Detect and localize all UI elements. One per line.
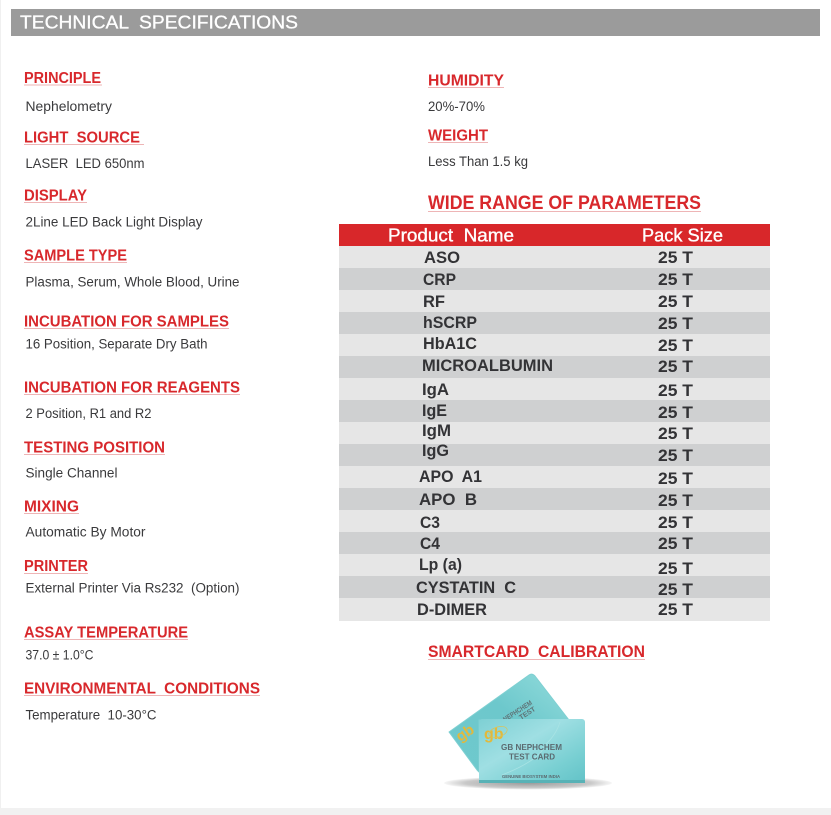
front card: GB NEPHCHEM <box>501 742 562 752</box>
pack sizes: 25 T <box>658 315 693 333</box>
product names: ASO <box>424 249 460 267</box>
spec: display: 2Line LED Back Light Display <box>26 214 203 230</box>
product names: APO A1 <box>419 468 482 486</box>
spec: testing position: Single Channel <box>26 466 118 480</box>
spec: humidity: 20%-70% <box>428 99 485 114</box>
product names: C3 <box>420 514 440 532</box>
spec: environmental conditions: ENVIRONMENTAL CONDITIONS <box>24 680 260 698</box>
pack sizes: 25 T <box>658 492 693 510</box>
front card <box>479 719 585 783</box>
spec: printer <box>24 558 240 596</box>
spec: light source: LASER LED 650nm <box>26 156 144 171</box>
icon: smart cards <box>444 674 612 790</box>
spec: weight <box>428 128 528 169</box>
spec: printer: External Printer Via Rs232 (Option) <box>26 580 240 596</box>
pack sizes: 25 T <box>658 249 693 267</box>
pack sizes: 25 T <box>658 404 693 422</box>
spec: environmental conditions: Temperature 10-30°C <box>26 708 157 722</box>
spec: mixing: Automatic By Motor <box>26 524 146 540</box>
spec: printer: PRINTER <box>24 558 88 575</box>
pack sizes: 25 T <box>658 535 693 553</box>
product names: HbA1C <box>423 335 477 353</box>
back card <box>449 674 569 772</box>
table header <box>339 224 770 246</box>
product names: IgE <box>422 402 447 420</box>
spec: principle <box>24 70 112 114</box>
pack sizes: 25 T <box>658 514 693 532</box>
pack sizes: 25 T <box>658 293 693 311</box>
spec: display <box>24 188 203 230</box>
pack sizes: 25 T <box>658 601 693 619</box>
spec: testing position <box>24 440 165 480</box>
pack sizes <box>658 249 693 619</box>
spec: display: DISPLAY <box>24 188 87 204</box>
spec: incubation for samples: INCUBATION FOR SAMPLES <box>24 314 229 330</box>
pack sizes: 25 T <box>658 560 693 578</box>
spec: assay temperature: ASSAY TEMPERATURE <box>24 624 188 642</box>
product names: IgG <box>422 442 449 460</box>
pack sizes: 25 T <box>658 271 693 289</box>
title banner: TECHNICAL SPECIFICATIONS <box>20 12 298 32</box>
spec: mixing <box>24 498 146 540</box>
spec: incubation for reagents: INCUBATION FOR REAGENTS <box>24 380 240 396</box>
product names <box>416 249 553 619</box>
title banner <box>11 9 820 36</box>
product names: hSCRP <box>423 314 477 332</box>
back card: NEPHCHEM <box>502 700 534 724</box>
table header: Product Name <box>388 226 514 246</box>
pack sizes: 25 T <box>658 581 693 599</box>
pack sizes: 25 T <box>658 425 693 443</box>
heading: wide range of parameters: WIDE RANGE OF PARAMETERS <box>428 193 701 214</box>
product names: APO B <box>419 491 477 509</box>
spec: humidity: HUMIDITY <box>428 72 504 90</box>
spec: testing position: TESTING POSITION <box>24 440 165 456</box>
spec: incubation for samples: 16 Position, Separate Dry Bath <box>26 336 208 352</box>
front card: gb <box>484 726 504 743</box>
card shadow <box>444 776 612 790</box>
spec: light source <box>24 130 144 171</box>
pack sizes: 25 T <box>658 382 693 400</box>
spec: assay temperature: 37.0 ± 1.0°C <box>26 648 94 662</box>
spec: principle: PRINCIPLE <box>24 70 101 87</box>
spec: light source: LIGHT SOURCE <box>24 130 140 146</box>
spec: incubation for reagents <box>24 380 240 421</box>
product names: IgA <box>422 381 449 399</box>
pack sizes: 25 T <box>658 358 693 376</box>
back card: TEST <box>518 706 538 722</box>
product names: CYSTATIN C <box>416 579 516 597</box>
product names: Lp (a) <box>419 556 462 574</box>
spec: environmental conditions <box>24 680 260 722</box>
spec: humidity <box>428 72 504 114</box>
product names: IgM <box>422 422 451 440</box>
table header: Pack Size <box>642 226 723 246</box>
front card: GENUINE BIOSYSTEM INDIA <box>502 774 561 779</box>
product names: RF <box>423 293 445 311</box>
back card: gb <box>453 721 478 745</box>
spec: incubation for samples <box>24 314 229 352</box>
spec: incubation for reagents: 2 Position, R1 and R2 <box>26 406 152 421</box>
product names: C4 <box>420 535 441 553</box>
spec: weight: Less Than 1.5 kg <box>428 154 528 169</box>
product names: D-DIMER <box>417 601 487 619</box>
spec: principle: Nephelometry <box>26 99 112 114</box>
panel: left specifications <box>24 70 260 722</box>
pack sizes: 25 T <box>658 337 693 355</box>
pack sizes: 25 T <box>658 447 693 465</box>
product names: CRP <box>423 271 456 289</box>
spec: weight: WEIGHT <box>428 128 488 144</box>
spec: sample type: Plasma, Serum, Whole Blood, Urine <box>26 274 240 290</box>
product names: MICROALBUMIN <box>422 357 553 375</box>
spec: assay temperature <box>24 624 188 662</box>
pack sizes: 25 T <box>658 470 693 488</box>
spec: mixing: MIXING <box>24 498 79 516</box>
table: parameters <box>339 224 770 621</box>
spec: sample type <box>24 248 240 290</box>
front card: TEST CARD <box>509 752 555 762</box>
heading: smartcard calibration: SMARTCARD CALIBRATION <box>428 643 645 661</box>
spec: sample type: SAMPLE TYPE <box>24 248 127 264</box>
